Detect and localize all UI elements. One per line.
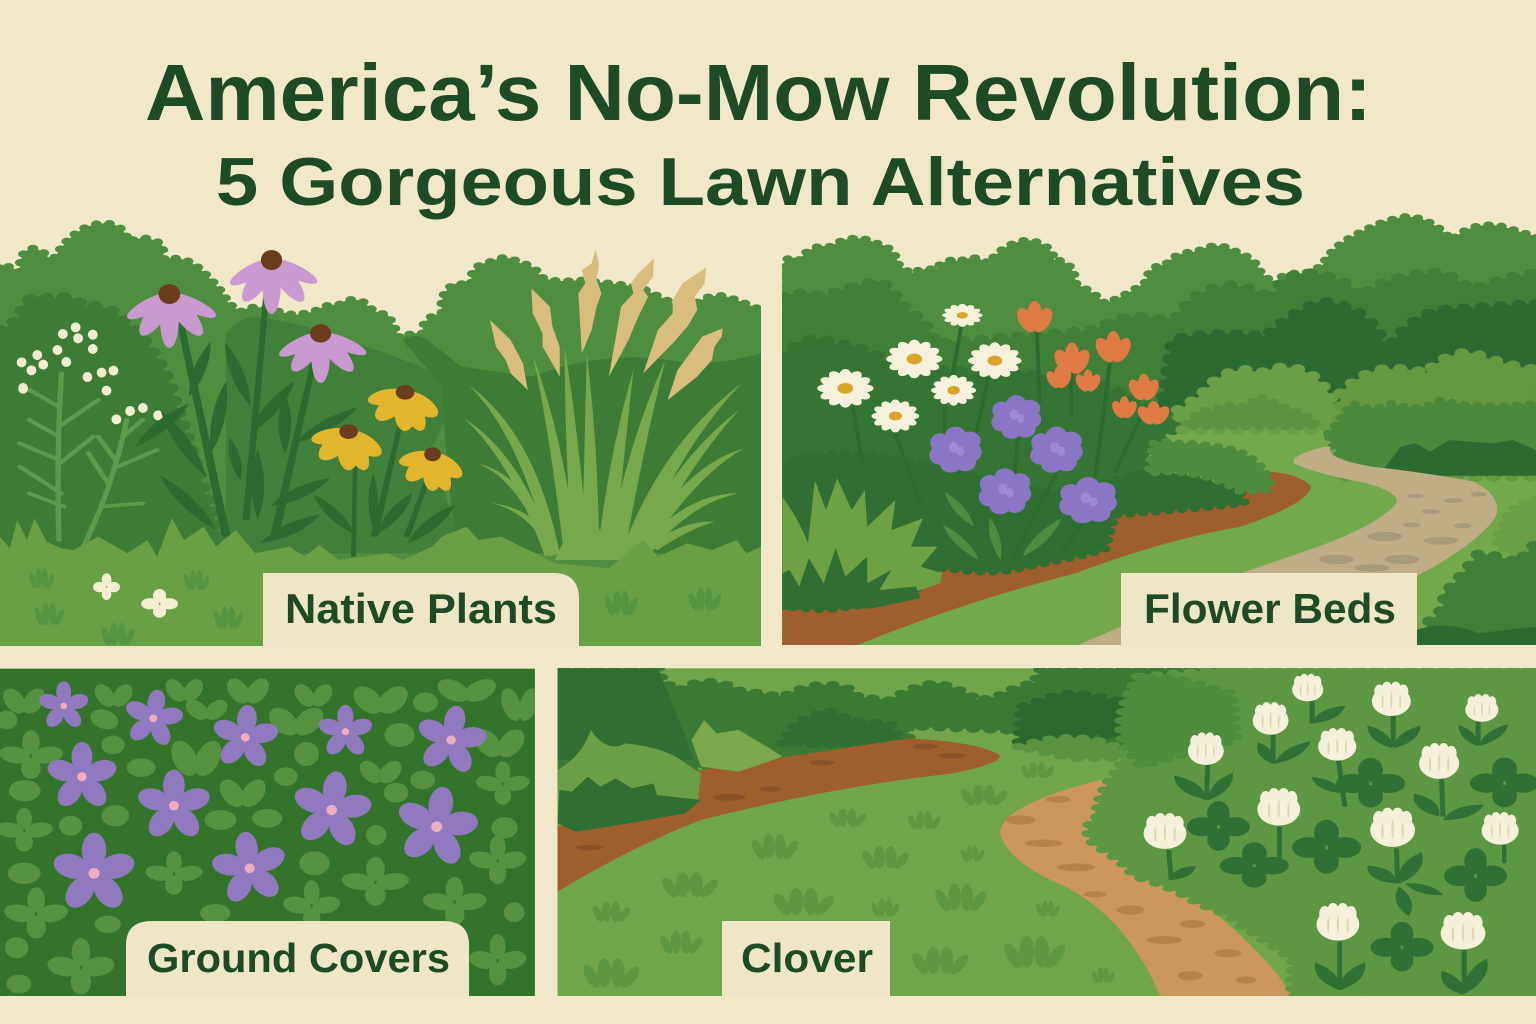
back hedge [558, 668, 1235, 827]
purple flowers [929, 395, 1117, 523]
light shrub right [1328, 353, 1536, 477]
stems and leaves [130, 263, 460, 557]
label: clover [722, 921, 890, 997]
bed leaves [942, 492, 1062, 560]
back bushes [782, 217, 1536, 645]
ground cover base [0, 669, 535, 996]
lawn [782, 423, 1536, 645]
light shrub centre [1178, 367, 1338, 430]
daisies [817, 304, 1022, 432]
stems and blossom leaves [1164, 700, 1514, 997]
dark hedge [1163, 302, 1536, 410]
title line 1: America’s No-Mow Revolution: [145, 48, 1372, 137]
back bushes [0, 220, 761, 568]
bed shrub [1149, 442, 1270, 492]
title [145, 48, 1372, 220]
mulch bed [782, 472, 1311, 645]
fern dark base [782, 548, 921, 610]
mid bushes [782, 273, 1536, 477]
dark hedge left-centre [783, 710, 905, 747]
panel: native plants [0, 223, 761, 646]
white clover blossoms [1144, 674, 1519, 950]
white blossoms [17, 322, 163, 436]
left shrubs [558, 668, 783, 832]
pampas plumes [490, 249, 723, 400]
clover-like leaves [0, 674, 543, 994]
stone path [1078, 447, 1497, 645]
panel: clover [558, 668, 1536, 997]
orange flowers [1013, 301, 1173, 426]
light mid shrub [1018, 738, 1132, 758]
clover leaves [1187, 758, 1536, 971]
yellow coneflowers [308, 385, 468, 493]
ornamental grass blades [464, 347, 744, 560]
feathery white-flowered plants [20, 373, 157, 547]
left fern [782, 478, 942, 607]
label: native plants [263, 573, 579, 646]
dirt path [1000, 778, 1292, 996]
flower bed dark foliage [782, 453, 1245, 610]
right dark foliage [403, 336, 761, 553]
left dark foliage [0, 297, 226, 553]
right foreground bush [1417, 500, 1536, 645]
label: ground covers: Ground Covers [147, 935, 450, 981]
ground tufts [28, 568, 723, 646]
label: clover: Clover [741, 935, 873, 981]
coneflowers [122, 250, 371, 383]
ground [0, 518, 761, 646]
darker bed edge [1121, 677, 1235, 767]
lawn tufts [580, 762, 1117, 989]
panel: ground covers [0, 669, 543, 997]
middle foliage [226, 317, 462, 553]
stems [851, 326, 1141, 489]
mulch [558, 738, 1000, 892]
title line 2: 5 Gorgeous Lawn Alternatives [216, 144, 1305, 220]
panel: flower beds [782, 217, 1536, 646]
dark hedge [1018, 693, 1128, 742]
label: ground covers [126, 921, 469, 997]
clover bed [1088, 668, 1536, 996]
label: flower beds [1121, 573, 1417, 646]
label: flower beds: Flower Beds [1144, 585, 1396, 632]
lawn [558, 668, 1536, 996]
purple flowers [37, 681, 494, 913]
label: native plants: Native Plants [285, 585, 557, 632]
left dark bush behind flowers [782, 335, 1182, 574]
small white ground flowers [93, 573, 178, 618]
